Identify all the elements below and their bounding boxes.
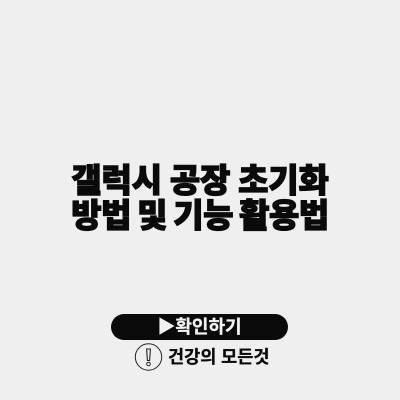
confirm button: ▶확인하기 — [157, 317, 242, 337]
confirm button — [111, 314, 288, 340]
title: 갤럭시 공장 초기화 — [71, 162, 329, 199]
title: 방법 및 기능 활용법 — [71, 197, 329, 234]
icon: exclamation in circle — [134, 343, 162, 371]
title — [71, 162, 329, 234]
caption: 건강의 모든것 — [168, 347, 269, 367]
